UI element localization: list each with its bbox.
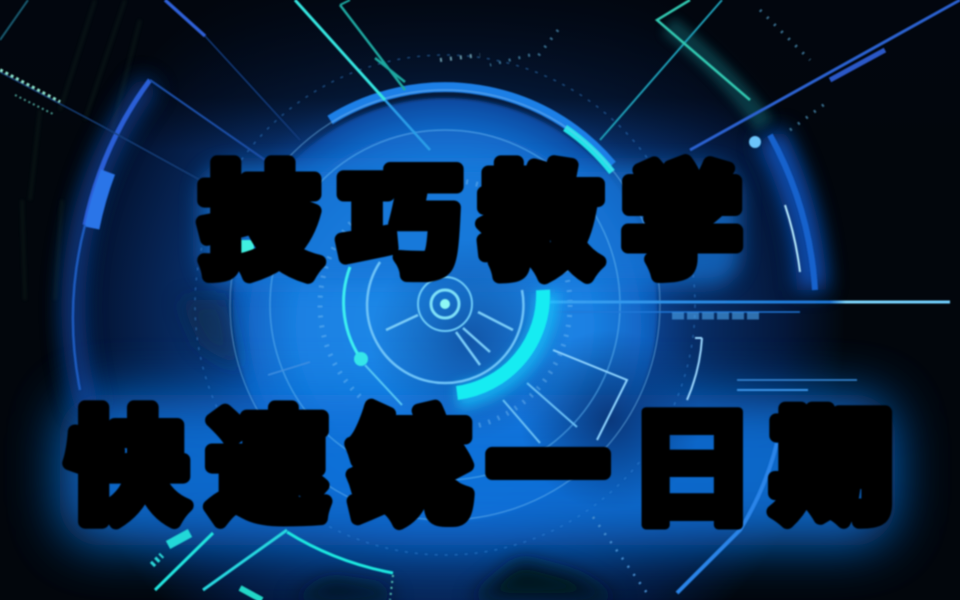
title: second line: 快速统一 xyxy=(68,402,608,536)
arc node xyxy=(354,352,368,366)
title: second line xyxy=(68,399,892,542)
halo behind first line xyxy=(200,165,740,285)
outer HUD rings xyxy=(73,55,815,593)
dark lower wedges xyxy=(180,300,620,600)
ring glows xyxy=(73,82,812,410)
bright central disc xyxy=(233,98,657,522)
small node icon xyxy=(749,136,761,148)
title: second line: 日 xyxy=(628,399,756,542)
inner ring xyxy=(367,262,523,383)
top darkening xyxy=(0,0,960,150)
teal sweep band xyxy=(668,25,765,125)
title: second line: 期 xyxy=(772,402,892,536)
radar centre xyxy=(344,262,547,397)
thick cyan arc xyxy=(457,290,543,393)
glow behind cyan arc xyxy=(457,293,547,397)
hub rings xyxy=(418,277,472,331)
halo behind second line xyxy=(60,395,895,545)
faint radial streaks xyxy=(22,0,140,300)
title: first line: 技巧教学 xyxy=(200,157,742,291)
darker inner sectors xyxy=(370,240,700,510)
spokes xyxy=(386,312,513,365)
thin cyan arc xyxy=(344,267,363,362)
cyan patches seen through first character xyxy=(240,198,268,264)
